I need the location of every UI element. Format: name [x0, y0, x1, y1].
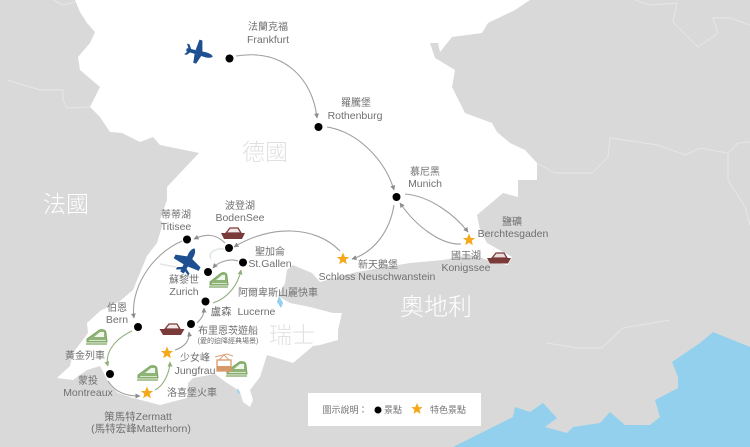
icon: boat BodenSee: [221, 228, 245, 239]
route arrows: [107, 55, 468, 396]
place labels: Zurich: [169, 286, 199, 298]
place labels: Berchtesgaden: [478, 228, 548, 240]
place labels: (愛的迫降經典場景): [198, 336, 258, 345]
country label: Switzerland: 瑞士: [269, 322, 315, 348]
place labels: Jungfrau: [175, 365, 216, 377]
icon: train Zurich: [209, 273, 228, 287]
icon: boat Konigssee: [487, 253, 511, 264]
legend: 圖示說明：: [322, 404, 368, 415]
place labels: [63, 20, 548, 435]
icon: train golden pass: [86, 330, 107, 344]
place labels: 蒂蒂湖: [161, 209, 191, 221]
icon: plane to Frankfurt: [183, 37, 216, 67]
country label: Germany: 德國: [242, 139, 288, 165]
border lines on neighbouring countries: [7, 0, 750, 348]
place labels: Konigssee: [441, 262, 491, 274]
place labels: 鹽礦: [502, 215, 522, 228]
place labels: 布里恩茨遊船: [198, 324, 258, 337]
icon: train Jungfrau: [226, 362, 247, 376]
place labels: 盧森 Lucerne: [211, 305, 276, 318]
place labels: Rothenburg: [328, 110, 383, 122]
place labels: 羅騰堡: [341, 96, 371, 109]
place labels: Schloss Neuschwanstein: [319, 271, 436, 283]
place labels: 波登湖: [225, 199, 255, 212]
country label: Austria: 奧地利: [400, 294, 472, 321]
place labels: Frankfurt: [247, 34, 289, 46]
icon: train Zermatt: [137, 366, 158, 380]
place labels: Montreaux: [63, 387, 114, 399]
place labels: Titisee: [161, 221, 191, 233]
country label: France: 法國: [43, 191, 89, 217]
place labels: 聖加侖: [255, 245, 285, 258]
place labels: 洛喜堡火車: [167, 386, 217, 399]
place labels: 策馬特Zermatt: [104, 410, 172, 423]
place labels: (馬特宏峰Matterhorn): [91, 422, 191, 435]
icon: boat Brienz: [160, 324, 184, 335]
place labels: BodenSee: [215, 212, 265, 224]
place labels: 新天鵝堡: [358, 258, 398, 271]
map: Germany and Switzerland: [57, 0, 537, 407]
place labels: 阿爾卑斯山麗快車: [238, 286, 318, 299]
place labels: Munich: [408, 178, 442, 190]
lakes: [237, 296, 283, 394]
place labels: 蘇黎世: [169, 273, 199, 286]
sea: [453, 332, 750, 447]
place labels: Bern: [106, 314, 128, 326]
icon: plane to Zurich: [170, 242, 207, 279]
legend: [308, 393, 481, 426]
place labels: 法蘭克福: [248, 20, 288, 33]
spot markers: featured stars: [141, 234, 475, 398]
place labels: 慕尼黑: [410, 165, 440, 178]
spot markers: black dots: [106, 54, 400, 378]
place labels: 蒙投: [78, 374, 98, 387]
place labels: St.Gallen: [248, 258, 292, 270]
legend: 特色景點: [430, 404, 466, 415]
place labels: 伯恩: [107, 301, 127, 314]
place labels: 黃金列車: [65, 349, 105, 362]
place labels: 少女峰: [180, 351, 210, 364]
place labels: 國王湖: [451, 250, 481, 262]
legend: 景點: [384, 405, 402, 415]
icon: cable car: [215, 354, 233, 371]
